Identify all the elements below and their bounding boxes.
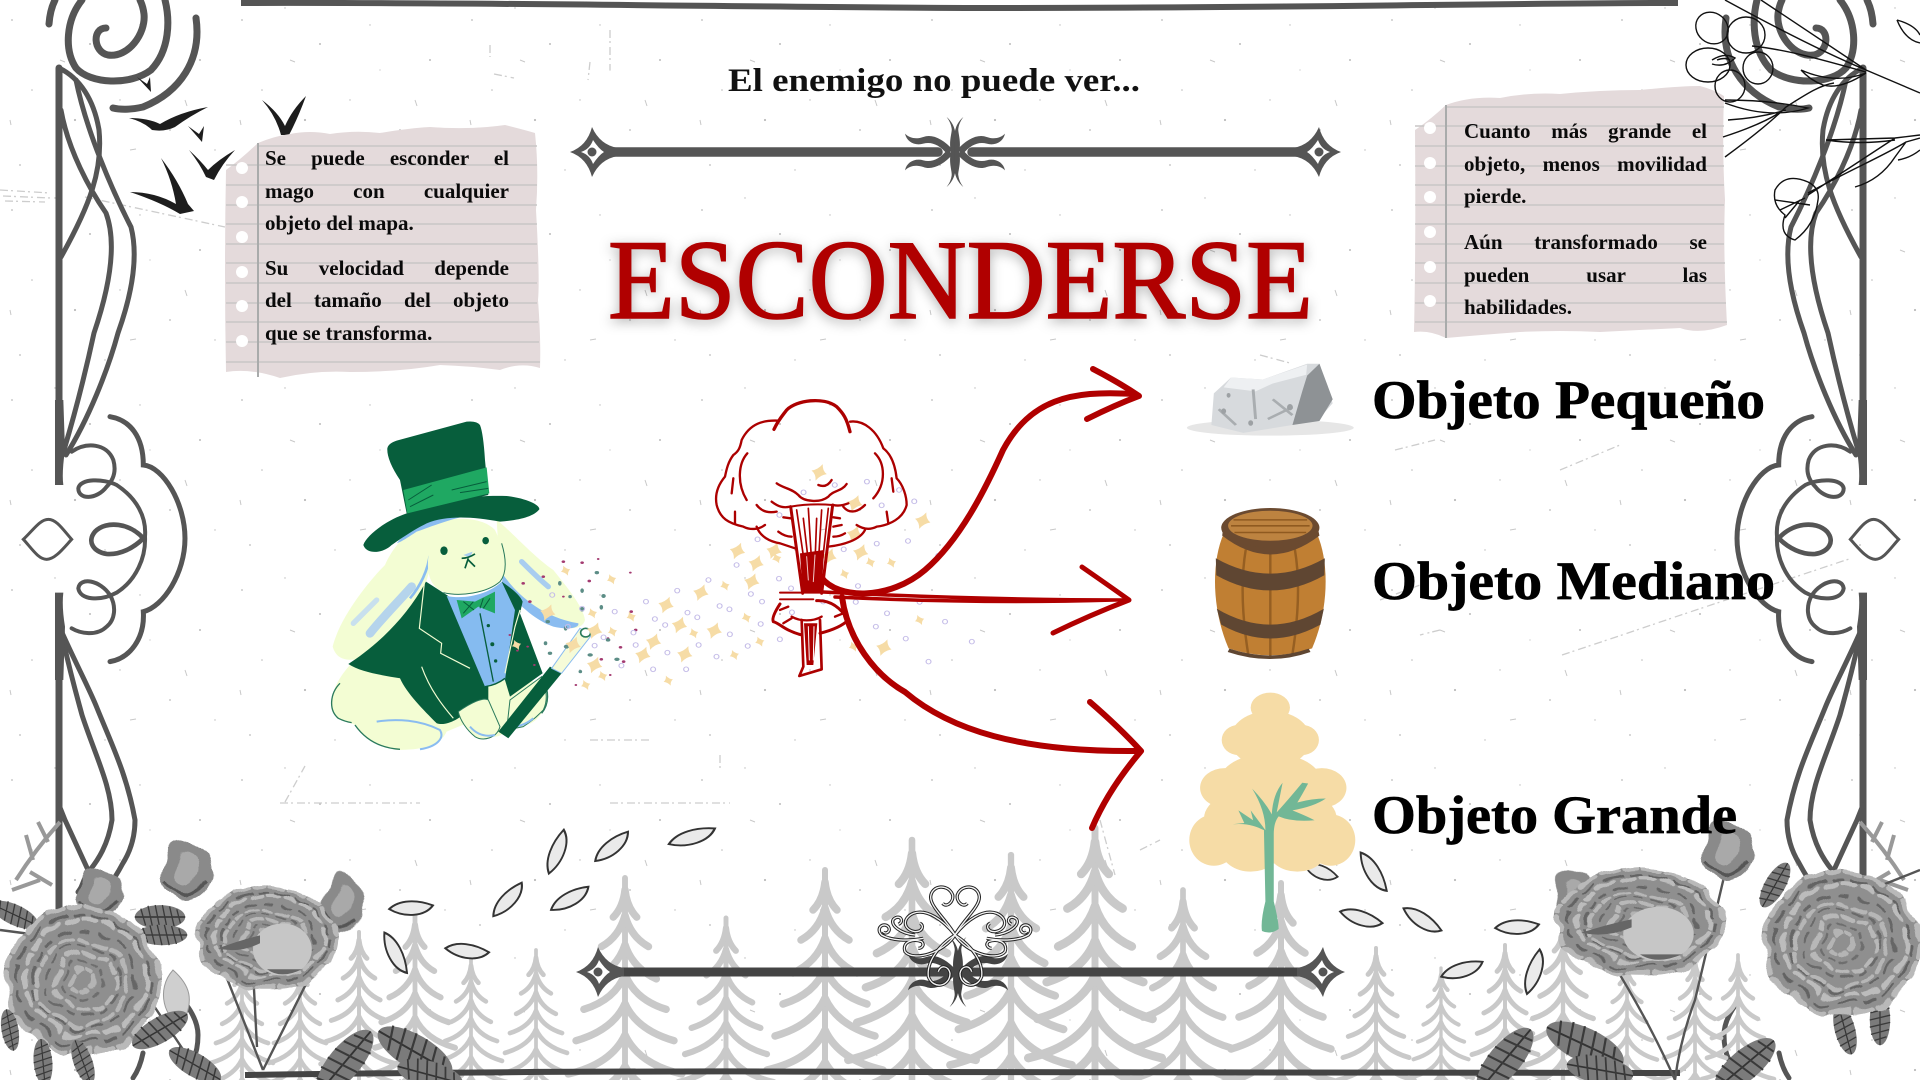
left ornamental frame (23, 0, 198, 1078)
label: large object: Objeto Grande (1372, 785, 1737, 845)
right note text: habilidades. (1464, 295, 1572, 319)
right note text: objeto, menos movilidad (1464, 152, 1707, 176)
right note text (1464, 119, 1707, 319)
left note text: del tamaño del objeto (265, 288, 509, 312)
icon: wooden barrel (1215, 508, 1326, 658)
pine forest silhouette (205, 828, 1775, 1080)
left note text: que se transforma. (265, 321, 432, 345)
bottom left flowers (0, 822, 466, 1080)
magic rabbit with top hat (332, 421, 592, 750)
left note text: Su velocidad depende (265, 256, 509, 280)
label: small object: Objeto Pequeño (1372, 370, 1765, 430)
bottom divider (576, 937, 1345, 1007)
top border bar (241, 3, 1678, 8)
birds (129, 77, 306, 214)
right note text: pueden usar las (1464, 263, 1707, 287)
sparkle particles (508, 462, 974, 691)
note paper right (1414, 86, 1727, 338)
label: medium object: Objeto Mediano (1372, 551, 1775, 611)
bottom right flowers (1467, 820, 1920, 1080)
flying leaves left (381, 826, 717, 977)
bottom border bar (245, 1071, 1680, 1075)
top divider (570, 117, 1341, 187)
flying leaves right (1303, 848, 1550, 996)
red arrows (821, 369, 1141, 828)
icon: pale tree (1189, 693, 1355, 933)
left note text (265, 146, 509, 345)
title: ESCONDERSE (608, 218, 1313, 343)
left note text: mago con cualquier (265, 179, 509, 203)
left note text: Se puede esconder el (265, 146, 509, 170)
line-art flowers top right (1686, 0, 1920, 240)
note paper left (225, 125, 540, 378)
red mushroom cloud (716, 401, 907, 676)
arrow to medium object (823, 567, 1129, 633)
arrow to small object (821, 369, 1139, 593)
icon: small rock (1187, 364, 1354, 436)
left note text: objeto del mapa. (265, 211, 414, 235)
bottom center swirl ornament (879, 887, 1031, 985)
subtitle: El enemigo no puede ver... (728, 63, 1140, 99)
right ornamental frame (1724, 0, 1899, 1078)
right note text: pierde. (1464, 184, 1526, 208)
right note text: Aún transformado se (1464, 230, 1707, 254)
arrow to large object (842, 597, 1141, 828)
right note text: Cuanto más grande el (1464, 119, 1707, 143)
